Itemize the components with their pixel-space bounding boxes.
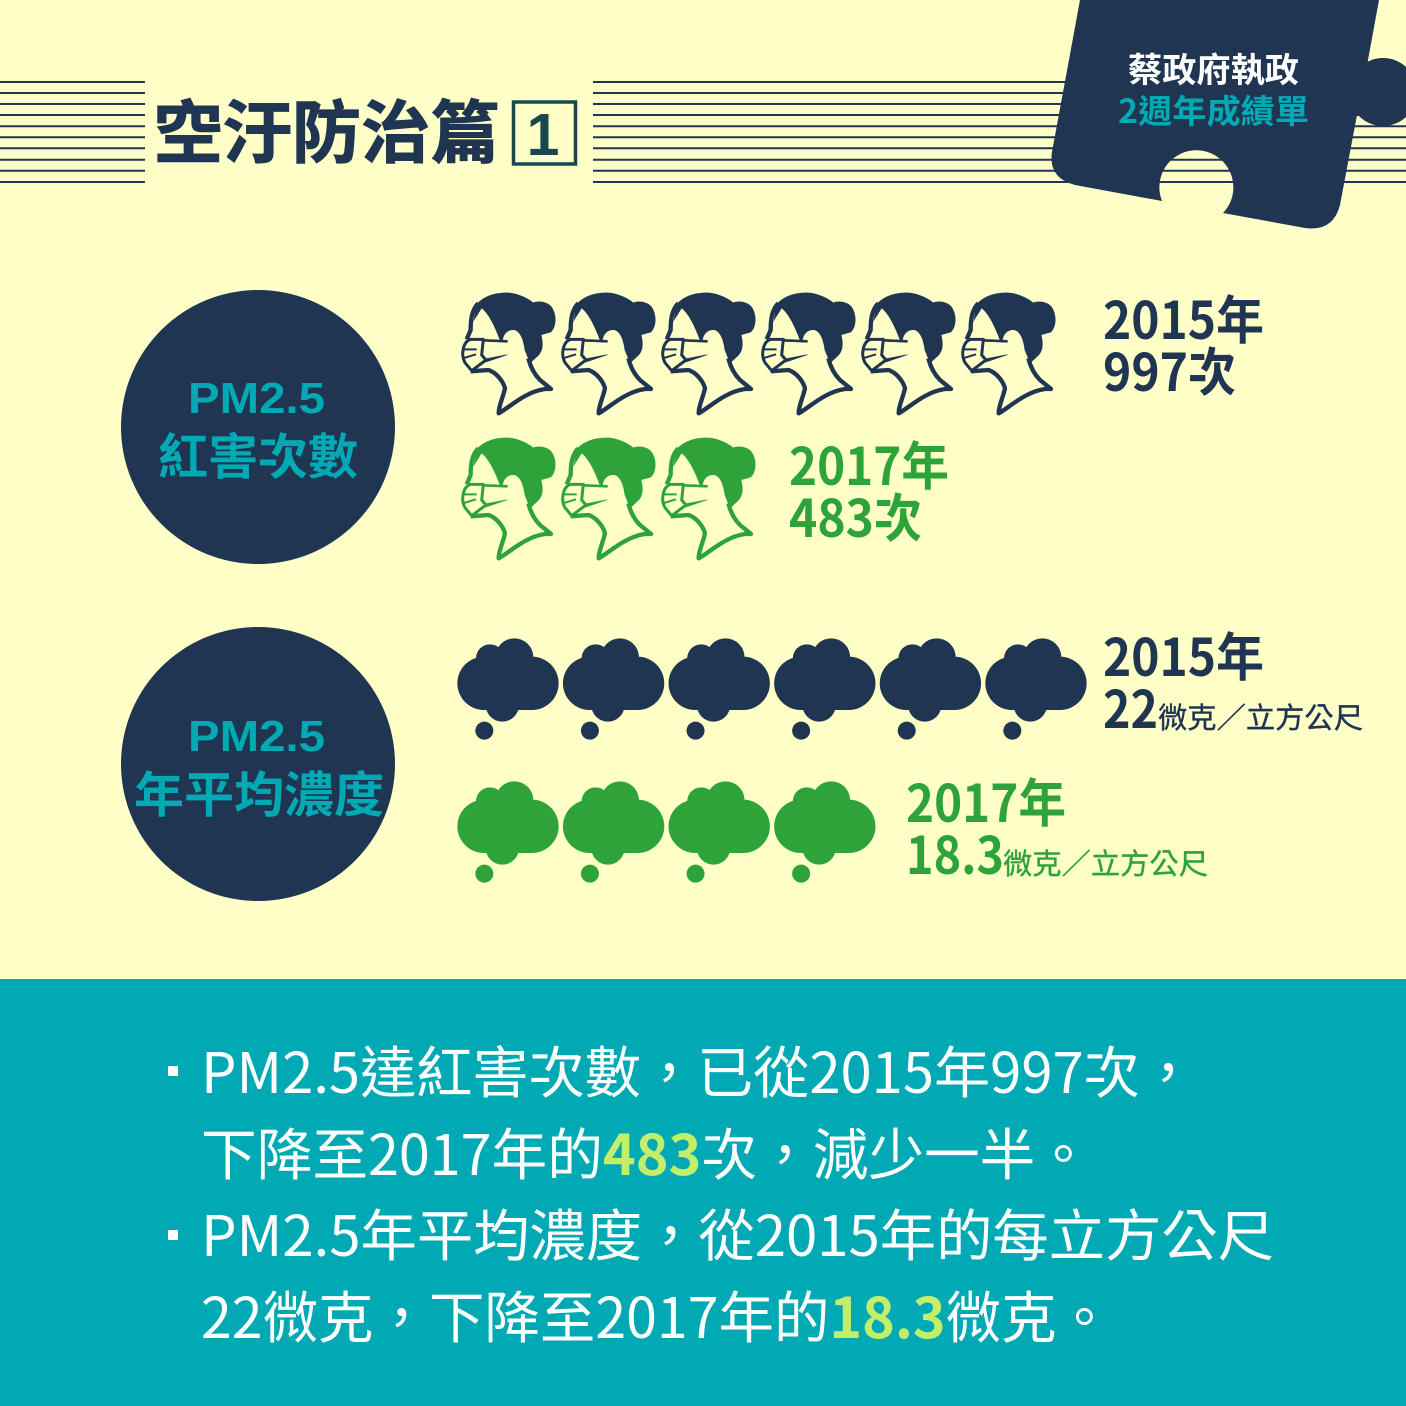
left header stripes: [0, 82, 145, 182]
summary text line 4: 22微克，下降至2017年的18.3微克。: [201, 1274, 1112, 1355]
badge heading: 蔡政府執政: [1128, 43, 1299, 92]
icons: 2017 masked heads: [463, 438, 756, 558]
label: 2017 concentration: 2017年: [906, 762, 1066, 837]
label: 2017 red alert count: [789, 425, 949, 552]
label: 2017 concentration: [906, 762, 1208, 889]
label: 2015 red alert count: 2015年: [1103, 279, 1264, 354]
label: 2017 red alert count: 483次: [789, 477, 922, 552]
bullet 1: [168, 1066, 178, 1076]
label: 2015 concentration: 22: [1103, 668, 1158, 743]
right header stripes: [593, 82, 1406, 182]
label: 2015 red alert count: [1103, 279, 1264, 406]
title number box: [514, 102, 576, 168]
icons: 2017 smog clouds: [457, 781, 875, 883]
panel: PM2.5 red alert circle: 紅害次數: [158, 418, 358, 489]
label: 2015 concentration: [1103, 616, 1363, 743]
icons: 2015 masked heads: [463, 293, 1056, 413]
title: 空汙防治篇: [154, 78, 500, 177]
bullet 2: [168, 1230, 178, 1240]
panel: PM2.5 annual concentration circle: 年平均濃度: [134, 756, 384, 827]
panel: summary band: [0, 979, 1406, 1406]
icons: 2015 smog clouds: [457, 638, 1087, 740]
label: 2017 concentration: 微克／立方公尺: [1003, 841, 1208, 883]
summary text line 2: 下降至2017年的483次，減少一半。: [201, 1111, 1091, 1192]
panel: PM2.5 red alert circle: PM2.5: [188, 374, 325, 423]
summary text line 3: PM2.5年平均濃度，從2015年的每立方公尺: [201, 1192, 1274, 1273]
badge subheading: 2週年成績單: [1118, 85, 1309, 133]
puzzle badge: [1051, 0, 1406, 229]
panel: PM2.5 red alert circle: [121, 290, 395, 564]
label: 2015 concentration: 微克／立方公尺: [1158, 695, 1363, 737]
label: 2015 concentration: 2015年: [1103, 616, 1264, 691]
summary text line 1: PM2.5達紅害次數，已從2015年997次，: [201, 1029, 1196, 1110]
title number box: 1: [527, 102, 559, 168]
panel: PM2.5 annual concentration circle: [121, 627, 395, 901]
label: 2015 red alert count: 997次: [1103, 331, 1236, 406]
label: 2017 concentration: 18.3: [906, 814, 1004, 889]
label: 2017 red alert count: 2017年: [789, 425, 949, 500]
panel: PM2.5 annual concentration circle: PM2.5: [188, 712, 325, 761]
